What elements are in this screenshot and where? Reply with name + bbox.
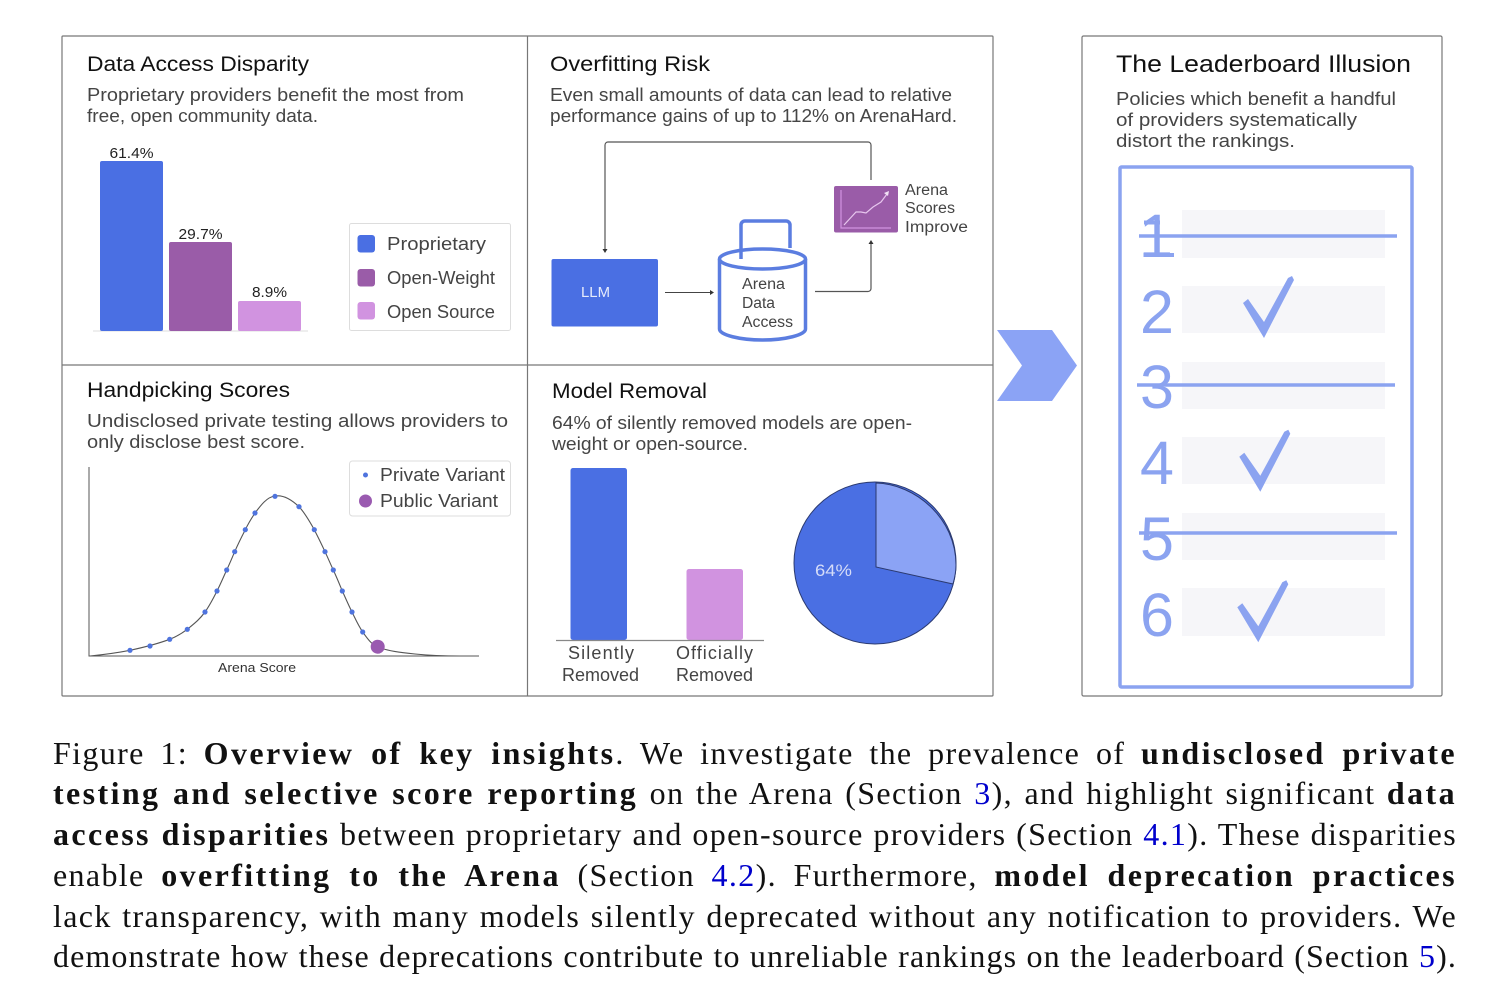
bar chart: silently vs officially removed: Removed xyxy=(562,665,639,685)
heading: handpicking scores: Handpicking Scores xyxy=(87,379,290,402)
row 1: struck out xyxy=(1139,202,1397,270)
row 2: checked: 2 xyxy=(1140,278,1174,346)
caption: figure 1 description: lack transparency, with many models silently deprecated without any notification to providers. We xyxy=(53,898,1457,934)
text block: arena scores improve: Improve xyxy=(905,219,968,236)
legend: provider types: Open Source xyxy=(387,302,495,322)
arrow: chevron to leaderboard xyxy=(997,330,1077,401)
pie chart: 64% open models: 64% xyxy=(815,561,852,580)
heading: data access disparity: Data Access Disparity xyxy=(87,53,310,76)
icon: arena data cylinder xyxy=(720,221,806,340)
text block: data access description: Proprietary providers benefit the most from xyxy=(87,85,464,105)
text block: overfitting description xyxy=(550,85,957,126)
text block: data access description: free, open community data. xyxy=(87,106,318,126)
text block: arena data access xyxy=(742,276,793,331)
text block: handpicking description: Undisclosed private testing allows providers to xyxy=(87,411,508,431)
text block: arena data access: Access xyxy=(742,314,793,331)
caption: figure 1 description: Figure 1: Overview of key insights. We investigate the prevalence of undisclosed private xyxy=(53,735,1457,771)
bar: open source 8.9% xyxy=(238,284,301,331)
text block: arena data access: Data xyxy=(742,295,775,312)
text block: leaderboard description: of providers systematically xyxy=(1116,110,1357,130)
text block: arena scores improve xyxy=(905,182,968,236)
bar: open-weight 29.7% xyxy=(169,226,232,331)
box: LLM: LLM xyxy=(581,284,610,301)
text block: overfitting description: Even small amounts of data can lead to relative xyxy=(550,85,952,105)
bar: proprietary 61.4% xyxy=(100,145,163,331)
bar chart: silently vs officially removed xyxy=(556,468,764,685)
pie chart: 64% open models xyxy=(794,482,956,644)
text block: model removal description: weight or open-source. xyxy=(551,434,748,454)
text block: handpicking description xyxy=(87,411,508,452)
heading: model removal: Model Removal xyxy=(552,380,707,403)
text block: arena data access: Arena xyxy=(742,276,785,293)
panel: model removal xyxy=(551,380,956,685)
row 3: struck out: 3 xyxy=(1140,353,1174,421)
panel: four-quadrant frame xyxy=(62,36,993,696)
caption: figure 1 description: enable overfitting to the Arena (Section 4.2). Furthermore, model deprecation practices xyxy=(53,857,1457,893)
caption: figure 1 description: access disparities between proprietary and open-source providers (Section 4.1). These disparities xyxy=(53,816,1457,852)
text block: model removal description xyxy=(551,413,912,454)
panel: handpicking scores xyxy=(87,379,510,675)
legend: variants xyxy=(350,461,510,516)
panel: overfitting risk xyxy=(550,53,968,340)
box: LLM xyxy=(552,259,658,326)
row 5: struck out: 5 xyxy=(1140,505,1174,573)
text block: arena scores improve: Arena xyxy=(905,182,948,199)
row 6: checked xyxy=(1140,580,1288,649)
chart: score distribution curve: Arena Score xyxy=(218,661,296,675)
text block: handpicking description: only disclose best score. xyxy=(87,432,305,452)
row 4: checked xyxy=(1140,429,1290,497)
caption: figure 1 description: testing and selective score reporting on the Arena (Section 3), and highlight significant data xyxy=(53,775,1457,811)
text block: model removal description: 64% of silently removed models are open- xyxy=(552,413,912,433)
legend: variants: Public Variant xyxy=(380,491,498,511)
heading: the leaderboard illusion: The Leaderboard Illusion xyxy=(1116,51,1411,78)
arrow: feedback loop to LLM xyxy=(602,142,871,253)
arrow: LLM to data xyxy=(665,290,714,295)
text block: data access description xyxy=(87,85,464,126)
list: ranking checklist xyxy=(1120,167,1412,687)
caption: figure 1 description: demonstrate how these deprecations contribute to unreliable rankings on the leaderboard (Section 5). xyxy=(53,938,1457,974)
chart: score distribution curve xyxy=(89,467,479,675)
bar chart: silently vs officially removed: Officially xyxy=(676,643,753,663)
bar chart: data share by provider type xyxy=(93,145,308,331)
legend: variants: Private Variant xyxy=(380,465,505,485)
text block: overfitting description: performance gains of up to 112% on ArenaHard. xyxy=(550,106,957,126)
text block: leaderboard description: distort the rankings. xyxy=(1116,131,1295,151)
panel: the leaderboard illusion xyxy=(1082,36,1442,696)
text block: leaderboard description: Policies which benefit a handful xyxy=(1116,89,1396,109)
arrow: data to scores xyxy=(815,240,874,292)
text block: leaderboard description xyxy=(1116,89,1396,151)
row 2: checked xyxy=(1140,276,1294,346)
heading: overfitting risk: Overfitting Risk xyxy=(550,53,711,76)
bar: proprietary 61.4%: 61.4% xyxy=(110,145,154,162)
bar: open source 8.9%: 8.9% xyxy=(252,284,287,301)
text block: arena scores improve: Scores xyxy=(905,200,955,217)
bar: open-weight 29.7%: 29.7% xyxy=(178,226,222,243)
legend: provider types xyxy=(350,224,510,330)
icon: rising score chart xyxy=(834,186,898,232)
legend: provider types: Proprietary xyxy=(387,234,486,254)
bar chart: silently vs officially removed: Silently xyxy=(568,643,634,663)
row 4: checked: 4 xyxy=(1140,429,1174,497)
bar chart: silently vs officially removed: Removed xyxy=(676,665,753,685)
legend: provider types: Open-Weight xyxy=(387,268,495,288)
panel: data access disparity xyxy=(87,53,510,331)
row 1: struck out: 1 xyxy=(1139,202,1173,270)
row 6: checked: 6 xyxy=(1140,581,1174,649)
